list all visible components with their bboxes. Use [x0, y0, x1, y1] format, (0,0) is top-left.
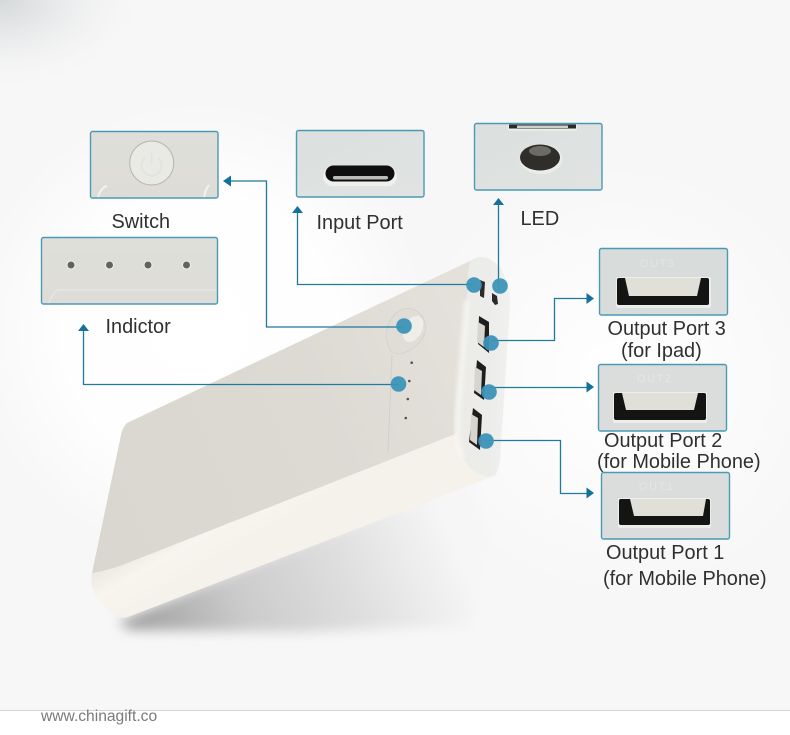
- end face highlight: [457, 300, 467, 458]
- connector: indicator arrow: [78, 324, 398, 384]
- indicator dots: [67, 261, 190, 269]
- micro usb socket: [323, 166, 397, 186]
- label: output port 3: (for Ipad): [621, 340, 702, 362]
- label: switch: Switch: [112, 211, 170, 233]
- usb port 3: [477, 316, 489, 353]
- watermark: www.chinagift.co: [40, 708, 157, 725]
- usb socket: [613, 392, 707, 423]
- seam: [388, 355, 392, 452]
- connector: input port arrow: [292, 206, 474, 284]
- connector: switch arrow: [223, 176, 404, 327]
- micro port: [480, 280, 485, 298]
- usb port 2: [474, 360, 486, 400]
- port edge: [508, 124, 577, 130]
- label: output port 1: (for Mobile Phone): [603, 568, 767, 590]
- usb port 1: [469, 408, 482, 450]
- label: output port 1: [603, 542, 767, 590]
- label: output port 1: Output Port 1: [606, 542, 724, 564]
- label: output port 2: [597, 430, 761, 473]
- indicator holes: [404, 361, 413, 419]
- device body side: [92, 425, 497, 618]
- device top face: [92, 260, 472, 573]
- thumbnail: output port 1: [602, 472, 730, 539]
- label: input port: Input Port: [316, 212, 403, 234]
- thumbnail: output port 3: [600, 248, 728, 315]
- switch button icon: [130, 141, 174, 185]
- usb socket: [618, 498, 711, 528]
- led lens: [520, 144, 562, 174]
- thumbnail: led: [474, 124, 602, 190]
- connector: output 1 arrow: [486, 440, 594, 498]
- connector: led arrow: [493, 198, 504, 286]
- connector: output 2 arrow: [489, 382, 594, 392]
- label: output port 2: (for Mobile Phone): [597, 451, 761, 473]
- power bank device: [92, 257, 510, 618]
- thumbnail: input port: [296, 130, 424, 197]
- connector: output 3 arrow: [491, 293, 594, 340]
- thumbnail: output port 2: [598, 364, 726, 431]
- label: output port 3: Output Port 3: [608, 318, 726, 340]
- label: led: LED: [520, 208, 559, 230]
- led hole: [492, 293, 498, 305]
- label: indicator: Indictor: [106, 316, 171, 338]
- marker dots: [391, 277, 508, 449]
- label: output port 3: [608, 318, 726, 362]
- switch button: [386, 309, 428, 354]
- thumbnail: output port 3: OUT3: [640, 258, 675, 270]
- device end face: [457, 257, 510, 477]
- thumbnail: output port 2: OUT2: [637, 373, 672, 385]
- device shadow: [118, 480, 490, 632]
- usb socket: [616, 277, 711, 308]
- thumbnail: output port 1: OUT1: [639, 481, 674, 493]
- thumbnail: indicator: [42, 238, 218, 304]
- label: output port 2: Output Port 2: [604, 430, 722, 452]
- thumbnail: switch: [90, 132, 218, 198]
